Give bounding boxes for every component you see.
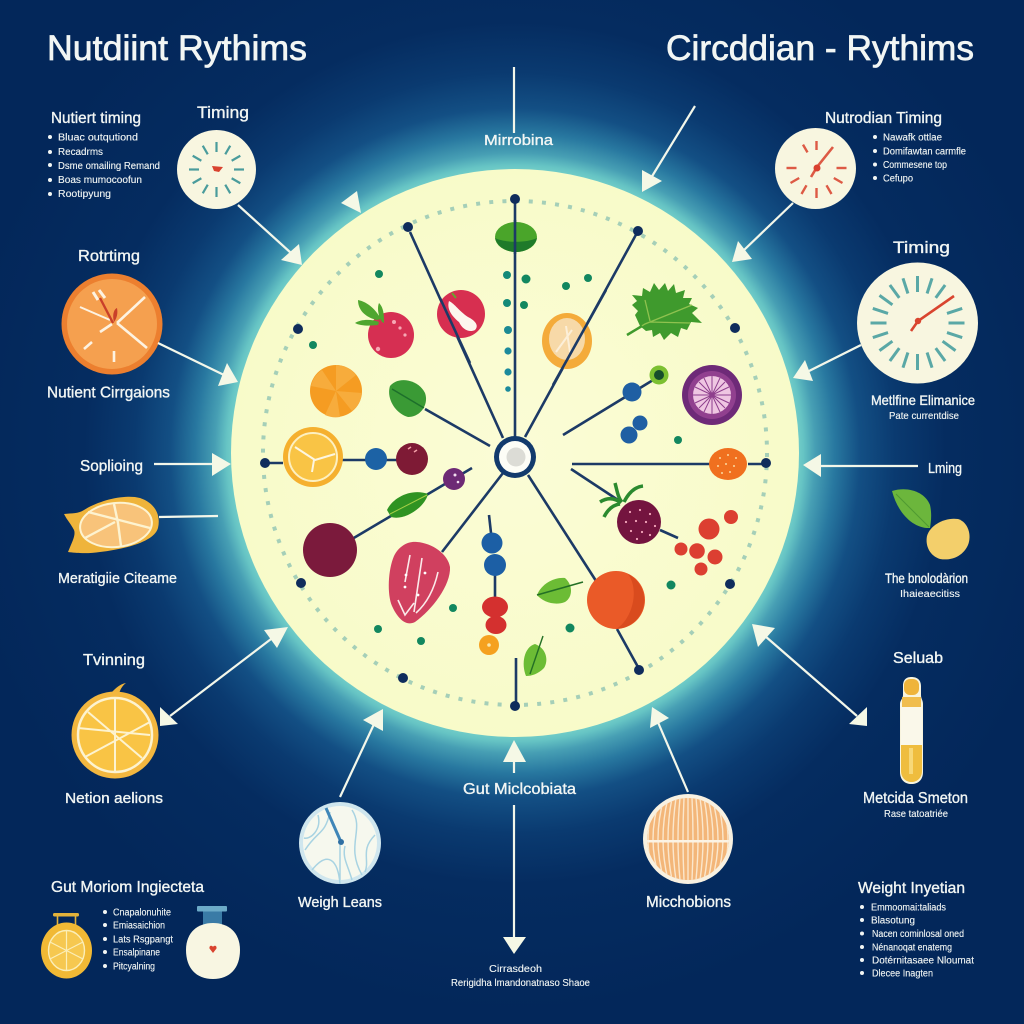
icon: striped orange ball <box>643 794 733 884</box>
food: purple onion <box>682 365 742 425</box>
label: nutient cirrgaions: Nutient Cirrgaions <box>47 384 170 402</box>
callout: gut moriom list with icons <box>41 879 240 979</box>
title: right: Circddian - Rythims <box>666 29 974 68</box>
arrow: centre vertical double headed with label <box>463 740 576 954</box>
bullet list: Emiasaichion <box>113 920 165 932</box>
callout: nutrodian timing list: Cefupo <box>883 174 913 184</box>
label: metcida smeton: Rase tatoatriée <box>884 808 948 820</box>
food: parsley leaf <box>627 283 702 340</box>
label: weigh leans: Weigh Leans <box>298 894 382 911</box>
icon: veined disc <box>299 802 381 884</box>
callout: nutrient timing list: Dsme omailing Remand <box>58 161 160 172</box>
label: metcida smeton: Metcida Smeton <box>863 790 968 807</box>
callout: weight inyetian list: Emmoomai:taliads <box>871 902 946 914</box>
icon: large cream clock right <box>857 262 978 384</box>
food: large orange fruit <box>587 571 645 629</box>
arrow: veined disc to main disc <box>340 709 383 797</box>
food: green leaves <box>524 578 583 676</box>
callout: nutrient timing list <box>48 110 160 200</box>
label: the bnolodarion <box>885 571 968 600</box>
callout: weight inyetian list: Blasotung <box>871 916 915 926</box>
arrow: top right diagonal <box>642 106 695 192</box>
bullet list: Cnapalonuhite <box>113 908 171 918</box>
callout: nutrient timing list: Recadrms <box>58 147 103 158</box>
food: sliced fruit <box>542 290 606 385</box>
food: orange <box>310 365 362 417</box>
label: netion aelions: Netion aelions <box>65 790 163 807</box>
arrow: top right clock to disc <box>732 203 793 262</box>
callout: gut moriom list with icons: Gut Moriom Ingiecteta <box>51 879 204 896</box>
callout: weight inyetian list: Nénanoqat enatemg <box>872 942 952 954</box>
central clock disc <box>231 169 799 737</box>
label: metlfine elimanice <box>871 392 975 422</box>
label: meratigiie citeame: Meratigiie Citeame <box>58 570 177 587</box>
food: orange speckled fruit <box>709 448 747 480</box>
callout: nutrodian timing list: Commesene top <box>883 160 947 171</box>
bullet list: Lats Rsgpangt <box>113 934 173 946</box>
arrow: striped ball to disc <box>650 707 688 792</box>
heading: timing top left: Timing <box>197 103 249 122</box>
label: lming with arrow: Lming <box>928 461 962 477</box>
callout: weight inyetian list: Dlecee Inagten <box>872 968 933 980</box>
callout: nutrodian timing list: Nawafk ottlae <box>883 132 942 144</box>
arrow: large clock to disc <box>793 345 861 381</box>
icon: citrus medal <box>41 913 92 978</box>
heading: tvinning: Tvinning <box>83 652 145 669</box>
heading: seluab: Seluab <box>893 650 943 667</box>
callout: nutrient timing list: Boas mumocoofun <box>58 175 142 186</box>
arrow: double headed lower left <box>160 627 288 726</box>
heading: timing right: Timing <box>893 239 950 257</box>
label: the bnolodarion: The bnolodàrion <box>885 571 968 586</box>
label: metlfine elimanice: Metlfine Elimanice <box>871 392 975 408</box>
food: maroon fruit, leaf, purple bead <box>303 468 465 577</box>
icon: lemon slice <box>72 683 158 778</box>
callout: weight inyetian list: Nacen cominlosal oned <box>872 929 964 940</box>
callout: nutrient timing list: Nutiert timing <box>51 110 141 127</box>
label: bottom centre caption <box>451 963 590 989</box>
arrow: orange clock to disc <box>158 343 238 386</box>
food: strawberry <box>355 300 414 358</box>
label: microbiota top with connector: Mirrobina <box>484 132 554 149</box>
small green dots <box>309 270 682 645</box>
label: the bnolodarion: Ihaieaecitiss <box>900 589 960 600</box>
clock spokes <box>265 199 766 706</box>
callout: weight inyetian list: Weight Inyetian <box>858 880 965 897</box>
bullet list <box>103 908 173 972</box>
food: cut apple <box>437 290 485 363</box>
label: lming with arrow <box>803 454 962 477</box>
label: soplioing with arrow <box>80 453 231 476</box>
label: metlfine elimanice: Pate currentdise <box>889 410 959 422</box>
label: soplioing with arrow: Soplioing <box>80 458 143 475</box>
label: bottom centre caption: Rerigidha lmandonatnaso Shaoe <box>451 977 590 989</box>
callout: nutrient timing list: Rootipyung <box>58 189 111 200</box>
connector: citrus fish to disc <box>159 516 218 517</box>
callout: weight inyetian list <box>858 880 974 980</box>
callout: nutrodian timing list: Domifawtan carmfle <box>883 146 966 158</box>
icon: cream clock top right <box>775 128 856 209</box>
label: bottom centre caption: Cirrasdeoh <box>489 963 542 975</box>
bullet list: Pitcyalning <box>113 962 155 972</box>
arrow: centre vertical double headed with label: Gut Miclcobiata <box>463 781 576 798</box>
label: microbiota top with connector <box>484 67 554 149</box>
bullet list: Ensalpinane <box>113 948 160 958</box>
callout: weight inyetian list: Dotérnitasaee Nloumat <box>872 956 974 966</box>
arrow: double headed lower right <box>752 624 867 726</box>
icon: orange clock <box>62 274 162 374</box>
food: citrus slice with beads <box>283 427 428 487</box>
label: metcida smeton <box>863 790 968 820</box>
food: green oval <box>495 220 537 254</box>
food: round leaf <box>389 380 426 417</box>
icon: test tube vial <box>900 677 923 784</box>
title: left: Nutdiint Rythims <box>47 29 307 68</box>
arrow: top left clock to disc <box>238 205 302 265</box>
clock hub <box>494 436 536 478</box>
food: blue and green beads <box>620 366 668 444</box>
food: dark berry <box>600 483 661 544</box>
icon: cream jar <box>186 906 240 979</box>
food: tongue-shaped fruit <box>389 542 450 623</box>
heading: rotrtimg: Rotrtimg <box>78 248 140 265</box>
callout: nutrient timing list: Bluac outqutiond <box>58 132 138 144</box>
food: red berries <box>674 510 738 576</box>
label: micchobions: Micchobions <box>646 894 731 911</box>
icon: citrus fish shape <box>64 497 159 553</box>
icon: cream clock top left <box>177 130 256 209</box>
arrow: small head near disc top <box>341 191 361 213</box>
icon: leaf and lemon <box>892 489 970 559</box>
callout: nutrodian timing list: Nutrodian Timing <box>825 110 942 127</box>
callout: nutrodian timing list <box>825 110 966 184</box>
spoke end dots <box>260 194 771 711</box>
food: bead stack <box>479 532 508 655</box>
